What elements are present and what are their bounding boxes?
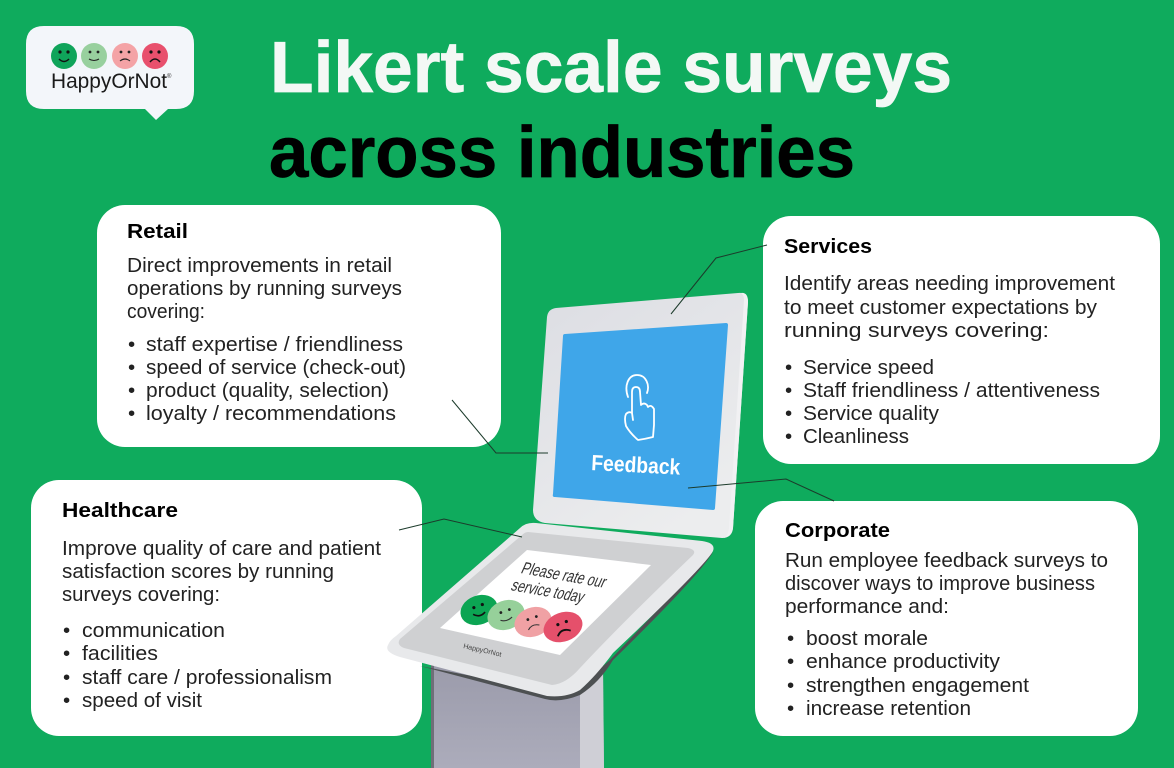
healthcare bullet list: staff care / professionalism (82, 666, 332, 689)
inner bezel (399, 532, 694, 685)
panel: corporate (755, 501, 1138, 736)
services heading: Services (784, 236, 872, 258)
callout line: services to screen (671, 245, 767, 314)
logo wordmark: HappyOrNot (51, 70, 167, 93)
services description: running surveys covering: (784, 319, 1049, 342)
corporate bullet list: strengthen engagement (806, 674, 1029, 697)
retail bullet list: staff expertise / friendliness (146, 333, 403, 356)
feedback label: Feedback (591, 450, 682, 480)
logo: HappyOrNot speech bubble (26, 26, 194, 120)
title line 1: Likert scale surveys (270, 28, 952, 108)
retail description: Direct improvements in retail (127, 254, 392, 277)
corporate description (785, 549, 1108, 618)
retail heading: Retail (127, 221, 188, 243)
retail bullet list (128, 333, 406, 425)
healthcare description (62, 537, 381, 606)
icon: kiosk good button (483, 595, 529, 635)
white touchscreen (440, 550, 651, 655)
services description: Identify areas needing improvement (784, 272, 1115, 295)
corporate heading: Corporate (785, 520, 890, 542)
retail bullet list: • (128, 402, 135, 425)
kiosk device (387, 245, 834, 768)
corporate bullet list: • (787, 674, 794, 697)
corporate bullet list: • (787, 650, 794, 673)
panel: services (763, 216, 1160, 464)
healthcare bullet list: • (63, 666, 70, 689)
retail description: operations by running surveys (127, 277, 402, 300)
retail description: covering: (127, 300, 205, 323)
healthcare heading: Healthcare (62, 500, 178, 522)
services bullet list: Staff friendliness / attentiveness (803, 379, 1100, 402)
panel: retail (97, 205, 501, 447)
healthcare bullet list: • (63, 619, 70, 642)
callout line: retail to screen (452, 400, 548, 453)
icon: kiosk happy button (456, 590, 502, 630)
icon: somewhat unhappy face (112, 43, 138, 69)
icon: touch hand (625, 375, 654, 440)
corporate bullet list: • (787, 697, 794, 720)
callout line: corporate to screen (688, 479, 834, 501)
icon: kiosk bad button (539, 607, 587, 647)
corporate bullet list: increase retention (806, 697, 971, 720)
kiosk lower panel (387, 523, 714, 700)
services bullet list (785, 356, 1100, 448)
screen prompt: Please rate our (518, 558, 610, 591)
blue feedback screen (553, 323, 728, 510)
title (269, 28, 952, 193)
healthcare bullet list (63, 619, 332, 712)
corporate description: discover ways to improve business (785, 572, 1095, 595)
services bullet list: • (785, 379, 792, 402)
retail bullet list: product (quality, selection) (146, 379, 389, 402)
retail bullet list: • (128, 356, 135, 379)
healthcare bullet list: • (63, 689, 70, 712)
screen prompt (508, 558, 610, 606)
services bullet list: Service quality (803, 402, 940, 425)
healthcare bullet list: facilities (82, 642, 158, 665)
healthcare bullet list: communication (82, 619, 225, 642)
icon: kiosk poor button (510, 602, 556, 642)
healthcare description: satisfaction scores by running (62, 560, 334, 583)
healthcare bullet list: • (63, 642, 70, 665)
callout line: healthcare to panel (399, 519, 522, 537)
title line 2: across industries (269, 113, 855, 193)
services bullet list: Cleanliness (803, 425, 909, 448)
icon: somewhat happy face (81, 43, 107, 69)
retail bullet list: speed of service (check-out) (146, 356, 406, 379)
corporate description: Run employee feedback surveys to (785, 549, 1108, 572)
healthcare description: surveys covering: (62, 583, 220, 606)
icon: unhappy face (142, 43, 168, 69)
kiosk upper screen (533, 293, 748, 538)
kiosk brand mark: HappyOrNot (463, 643, 502, 659)
corporate bullet list: enhance productivity (806, 650, 1001, 673)
retail bullet list: • (128, 379, 135, 402)
corporate bullet list: • (787, 627, 794, 650)
services description (784, 272, 1115, 342)
retail bullet list: loyalty / recommendations (146, 402, 396, 425)
services bullet list: • (785, 425, 792, 448)
healthcare description: Improve quality of care and patient (62, 537, 381, 560)
services description: to meet customer expectations by (784, 296, 1098, 319)
corporate bullet list (787, 627, 1029, 720)
services bullet list: Service speed (803, 356, 934, 379)
panel: healthcare (31, 480, 422, 736)
retail bullet list: • (128, 333, 135, 356)
screen prompt: service today (508, 575, 589, 606)
icon: happy face (51, 43, 77, 69)
kiosk stand (431, 660, 604, 768)
logo registered mark: ® (167, 73, 172, 80)
retail description (127, 254, 402, 323)
services bullet list: • (785, 356, 792, 379)
corporate bullet list: boost morale (806, 627, 928, 650)
services bullet list: • (785, 402, 792, 425)
healthcare bullet list: speed of visit (82, 689, 202, 712)
corporate description: performance and: (785, 595, 949, 618)
